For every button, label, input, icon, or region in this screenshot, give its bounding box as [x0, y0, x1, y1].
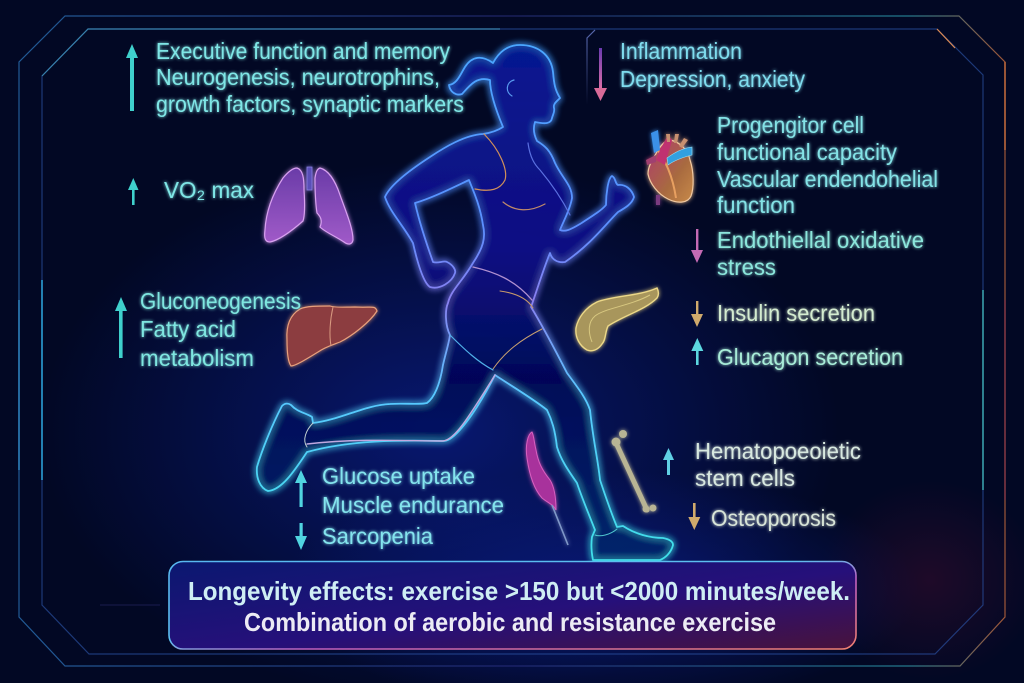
muscle text: Muscle endurance [322, 492, 504, 518]
arrow: glucose up [295, 470, 307, 507]
inflammation text: Inflammation [620, 38, 742, 64]
stem cells text: Hematopoeoietic [695, 438, 861, 464]
VO2 text: VO₂ max [164, 177, 254, 203]
heart text: Vascular endendohelial [717, 166, 938, 192]
runner figure [257, 45, 673, 560]
liver text: Fatty acid [140, 316, 236, 342]
brain text: Executive function and memory [156, 38, 450, 64]
liver text: Gluconeogenesis [140, 288, 301, 314]
brain text: growth factors, synaptic markers [156, 91, 464, 117]
oxidative stress text: stress [717, 254, 776, 280]
brain text [156, 38, 464, 117]
icon: lungs [265, 167, 353, 244]
glowing side ticks [90, 584, 985, 605]
icon: pancreas [576, 288, 658, 351]
corner bracket: reduced-effects box [587, 30, 595, 105]
insulin text: Insulin secretion [717, 300, 875, 326]
arrow: oxidative stress down [691, 229, 703, 263]
icon: bone [612, 430, 656, 512]
oxidative stress text: Endothiellal oxidative [717, 227, 924, 253]
arrow: osteoporosis down [688, 503, 700, 530]
liver text: metabolism [140, 345, 254, 371]
arrow: inflammation down [594, 48, 607, 101]
stem cells text [695, 438, 861, 491]
panel: longevity callout [169, 562, 856, 649]
osteoporosis text: Osteoporosis [711, 505, 836, 531]
arrow: sarcopenia down [295, 523, 307, 550]
arrow: insulin down [691, 301, 703, 327]
brain text: Neurogenesis, neurotrophins, [156, 64, 440, 90]
heart text: functional capacity [717, 139, 897, 165]
heart text [717, 112, 938, 218]
figure details [305, 80, 617, 536]
arrow: glucagon up [691, 338, 703, 365]
icon: liver [287, 306, 377, 366]
icon: muscle [526, 432, 568, 545]
callout text: Longevity effects: exercise >150 but <2000 minutes/week. [188, 576, 850, 606]
muscle text: Glucose uptake [322, 463, 475, 489]
icon: heart [646, 130, 693, 205]
inflammation text [620, 38, 805, 92]
liver text [140, 288, 301, 371]
arrow: brain up [126, 44, 138, 111]
arrow: liver up [115, 297, 127, 358]
oxidative stress text [717, 227, 924, 280]
stem cells text: stem cells [695, 465, 795, 491]
figure body [257, 45, 673, 560]
arrow: stem cells up [663, 448, 674, 475]
inflammation text: Depression, anxiety [620, 66, 805, 92]
glucagon text: Glucagon secretion [717, 344, 903, 370]
callout text: Combination of aerobic and resistance exercise [244, 607, 776, 637]
heart text: Progengitor cell [717, 112, 864, 138]
arrow: VO2 up [128, 178, 138, 205]
heart text: function [717, 192, 795, 218]
callout text [188, 576, 850, 637]
muscle text: Sarcopenia [322, 523, 434, 549]
muscle text [322, 463, 504, 549]
